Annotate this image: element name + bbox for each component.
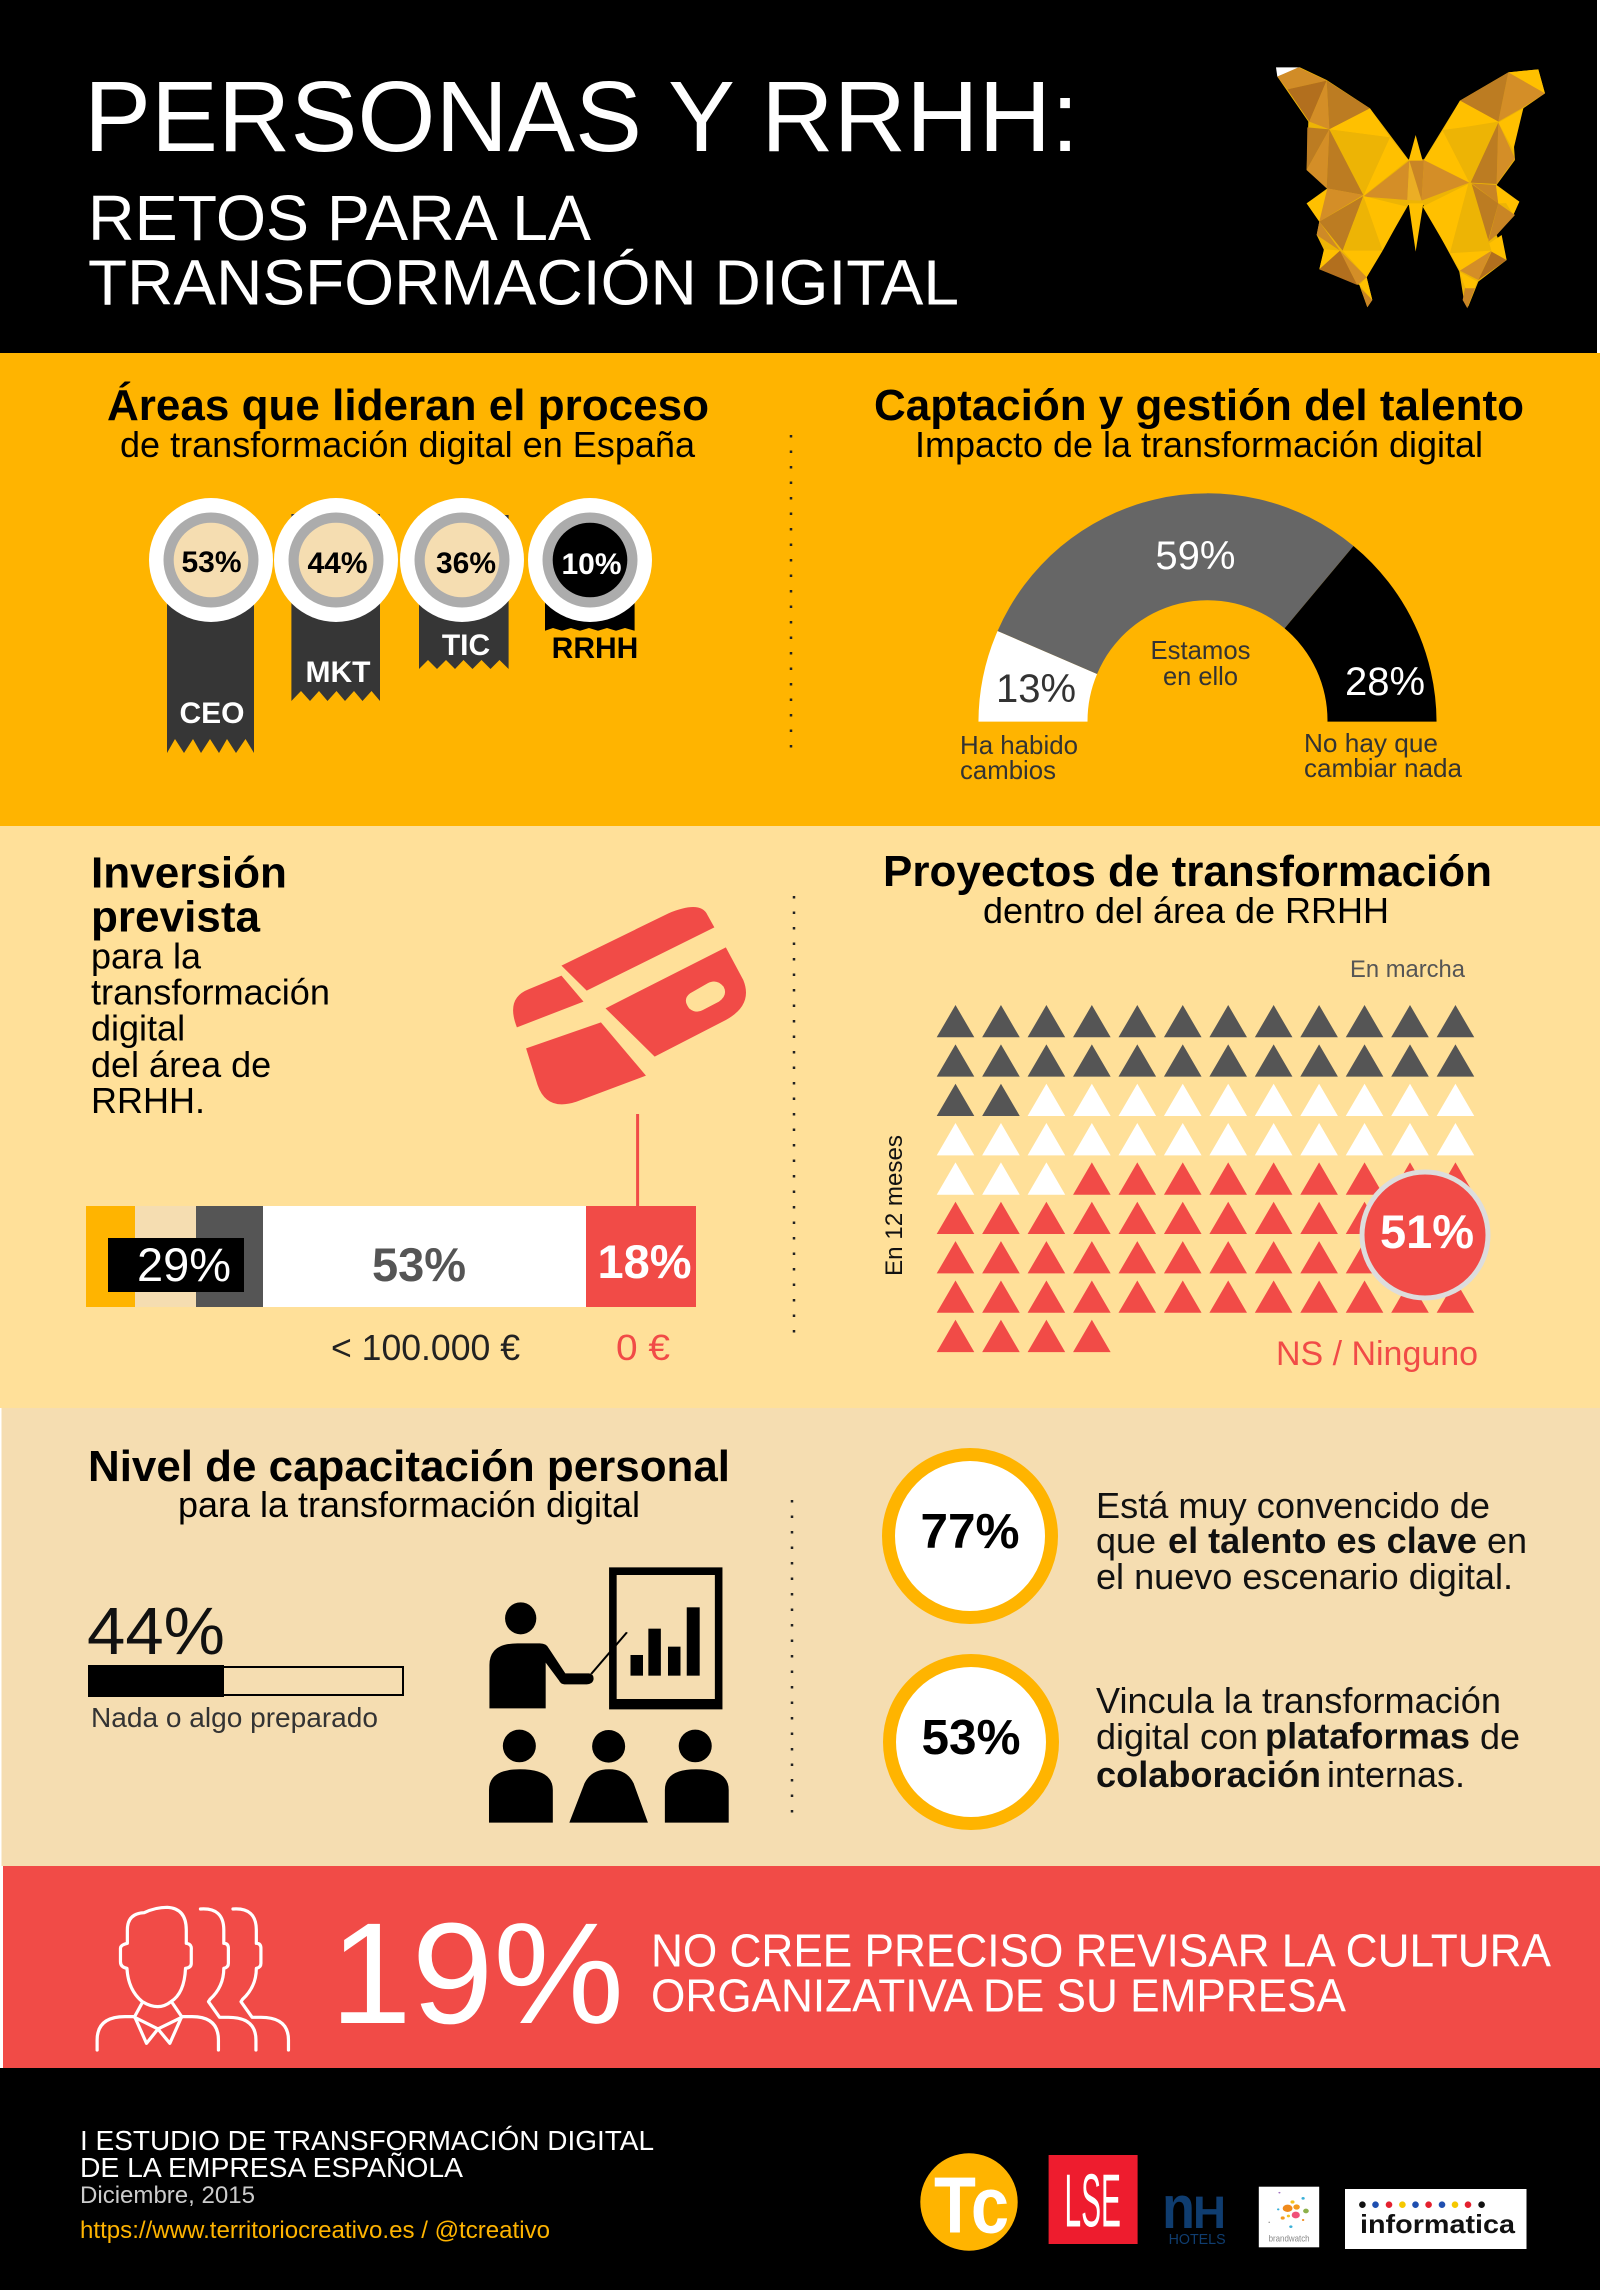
- heading: projects: Proyectos de transformación: [883, 847, 1492, 896]
- logo: NH Hotels: H: [1193, 2187, 1226, 2238]
- logo: LSE: LSE: [1064, 2159, 1121, 2243]
- callout: 53% platforms: de: [1480, 1716, 1520, 1757]
- badge chart: areas leading: MKT: [306, 656, 370, 689]
- gauge chart: talent impact: 13%: [996, 667, 1076, 711]
- icon: people outline: [97, 1907, 288, 2050]
- gauge chart: talent impact: 59%: [1155, 534, 1235, 578]
- badge chart: areas leading: CEO: [179, 697, 245, 730]
- gauge chart: talent impact: Estamos: [1150, 635, 1250, 665]
- heading: talent: [874, 381, 1524, 465]
- panel: header: [0, 0, 1597, 353]
- panel: training section: [2, 1408, 1600, 1866]
- callout: 77% talent: el talento es clave: [1168, 1520, 1477, 1561]
- pictogram chart: projects: NS / Ninguno: [1276, 1335, 1478, 1373]
- subtitle: TRANSFORMACIÓN DIGITAL: [88, 246, 959, 318]
- heading: investment: del área de: [91, 1044, 271, 1085]
- panel: footer: [0, 2068, 1600, 2290]
- icon: credit card: [513, 907, 746, 1104]
- callout: 53% platforms: digital con: [1096, 1716, 1258, 1757]
- heading: projects: dentro del área de RRHH: [983, 890, 1389, 931]
- logo: NH Hotels: HOTELS: [1169, 2231, 1226, 2248]
- stacked bar: investment: [86, 1206, 696, 1368]
- banner text: [651, 1924, 1551, 2022]
- gauge chart: talent impact: cambiar nada: [1304, 753, 1463, 783]
- badge chart: areas leading: 44%: [307, 547, 368, 580]
- logo: informatica: [1345, 2189, 1526, 2249]
- stacked bar: investment: 18%: [597, 1235, 692, 1288]
- footer text: https://www.territoriocreativo.es / @tcreativo: [80, 2217, 550, 2244]
- heading: investment: transformación: [91, 972, 330, 1012]
- panel: investment and projects section: [0, 826, 1600, 1408]
- stacked bar: investment: 29%: [137, 1238, 231, 1291]
- heading: investment: prevista: [91, 892, 261, 942]
- badge chart: areas leading: TIC: [442, 629, 490, 662]
- icon: presenter and audience: [489, 1567, 729, 1823]
- banner text: ORGANIZATIVA DE SU EMPRESA: [651, 1970, 1346, 2022]
- heading: investment: digital: [91, 1008, 185, 1048]
- panel: culture banner: [3, 1866, 1600, 2068]
- logo: brandwatch: brandwatch: [1269, 2234, 1310, 2245]
- gauge chart: talent impact: [960, 493, 1463, 785]
- gauge chart: talent impact: No hay que: [1304, 728, 1438, 758]
- progress bar: 44%: [87, 1594, 403, 1733]
- gauge chart: talent impact: 28%: [1345, 660, 1425, 704]
- heading: areas: Áreas que lideran el proceso: [107, 380, 709, 430]
- heading: investment: RRHH.: [91, 1080, 205, 1121]
- big number: 19%: 19%: [330, 1893, 624, 2054]
- pictogram chart: projects: En marcha: [1350, 956, 1466, 983]
- logo: NH Hotels: [1162, 2174, 1226, 2248]
- heading: investment: Inversión: [91, 848, 287, 898]
- callout: 77% talent: que: [1096, 1520, 1156, 1561]
- logo: LSE: [1049, 2155, 1138, 2244]
- heading: areas: de transformación digital en España: [120, 424, 696, 465]
- footer text: Diciembre, 2015: [80, 2182, 255, 2209]
- pictogram chart: projects: [881, 956, 1488, 1373]
- callout: 53% platforms: plataformas: [1265, 1716, 1470, 1756]
- callout: 77% talent: en: [1487, 1520, 1527, 1561]
- stacked bar: investment: < 100.000 €: [331, 1327, 520, 1368]
- badge chart: areas leading: RRHH: [552, 632, 638, 665]
- logo: informatica: informatica: [1360, 2209, 1516, 2239]
- callout: 77% talent: [888, 1454, 1527, 1618]
- callout: 53% platforms: [890, 1660, 1520, 1824]
- gauge chart: talent impact: en ello: [1163, 661, 1238, 691]
- footer text: DE LA EMPRESA ESPAÑOLA: [80, 2152, 463, 2183]
- heading: projects: [883, 847, 1492, 931]
- logo: Tc: Tc: [934, 2161, 1009, 2250]
- pictogram chart: projects: En 12 meses: [881, 1135, 908, 1276]
- callout: 77% talent: Está muy convencido de: [1096, 1485, 1490, 1526]
- callout: 53% platforms: 53%: [921, 1710, 1021, 1765]
- heading: talent: Captación y gestión del talento: [874, 381, 1524, 430]
- logo: NH Hotels: n: [1162, 2174, 1195, 2241]
- heading: investment: [91, 848, 330, 1121]
- badge chart: areas leading: [149, 498, 652, 753]
- heading: training: [88, 1442, 730, 1525]
- gauge chart: talent impact: Ha habido: [960, 730, 1078, 760]
- callout: 77% talent: el nuevo escenario digital.: [1096, 1556, 1513, 1597]
- banner text: NO CREE PRECISO REVISAR LA CULTURA: [651, 1924, 1551, 1976]
- progress bar: 44%: 44%: [87, 1594, 225, 1669]
- heading: training: Nivel de capacitación personal: [88, 1442, 730, 1491]
- callout: 77% talent: 77%: [920, 1504, 1020, 1559]
- heading: investment: para la: [91, 936, 202, 976]
- callout: 53% platforms: Vincula la transformación: [1096, 1680, 1501, 1721]
- badge chart: areas leading: 10%: [561, 548, 622, 581]
- heading: talent: Impacto de la transformación digital: [915, 424, 1483, 465]
- badge chart: areas leading: 53%: [181, 546, 242, 579]
- heading: areas: [107, 380, 709, 465]
- logo: brandwatch: [1259, 2187, 1319, 2247]
- title: PERSONAS Y RRHH:: [84, 61, 1079, 173]
- footer text: [80, 2125, 654, 2244]
- callout: 53% platforms: colaboración: [1096, 1754, 1321, 1795]
- stacked bar: investment: 53%: [372, 1238, 466, 1291]
- heading: training: para la transformación digital: [178, 1484, 640, 1525]
- icon: polygonal butterfly: [1276, 67, 1545, 308]
- stacked bar: investment: 0 €: [616, 1327, 670, 1368]
- gauge chart: talent impact: cambios: [960, 755, 1056, 785]
- subtitle: RETOS PARA LA: [88, 182, 591, 254]
- pictogram chart: projects: 51%: [1380, 1205, 1474, 1258]
- progress bar: 44%: Nada o algo preparado: [91, 1702, 378, 1733]
- footer text: I ESTUDIO DE TRANSFORMACIÓN DIGITAL: [80, 2125, 654, 2156]
- subtitle: [88, 182, 959, 318]
- panel: orange section: [0, 353, 1600, 826]
- callout: 53% platforms: internas.: [1327, 1754, 1465, 1795]
- badge chart: areas leading: 36%: [436, 547, 496, 580]
